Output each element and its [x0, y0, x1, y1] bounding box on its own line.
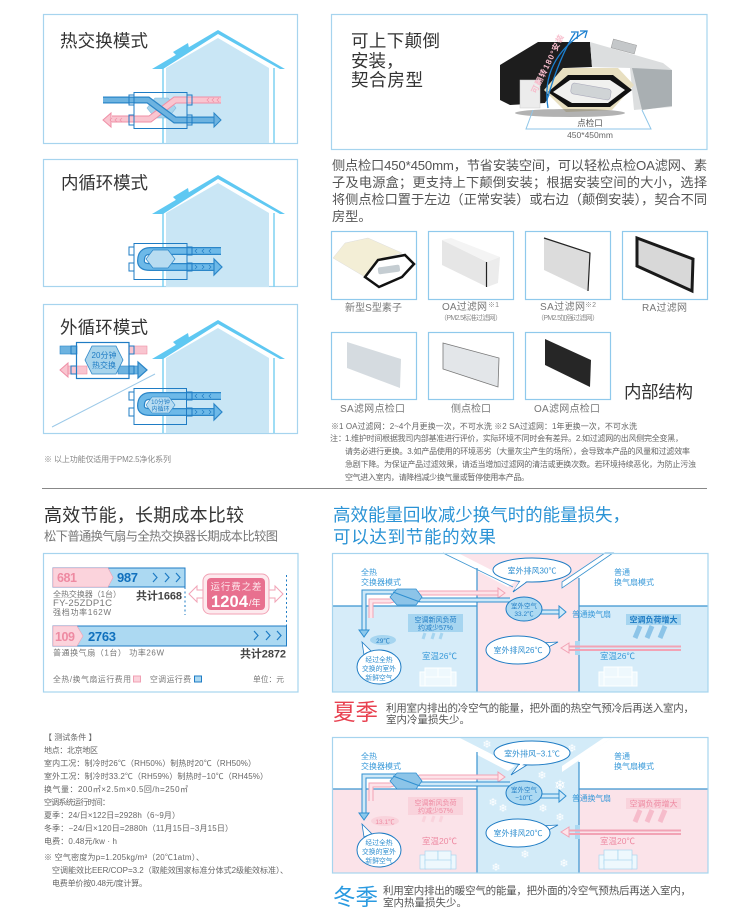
notes: filter replacement: 空气进入室内，请降档减少换气量或暂停使用本产品。 [345, 472, 529, 482]
bubble: outdoor air 33.2: 33.2℃ [514, 610, 534, 618]
airflow: winter pipes [359, 772, 681, 839]
text block: test conditions: 空调系统运行时间： [44, 797, 110, 807]
caption: SA filter: ※2 [585, 301, 596, 309]
labels: summer room temperature [422, 651, 635, 661]
diagram: heat exchanger airflow [103, 92, 221, 128]
filter card: OA filter [428, 232, 514, 300]
arrows: flip direction [547, 31, 587, 108]
bubble: outdoor exhaust 20: 室外排风20℃ [494, 828, 542, 838]
bar: ordinary ventilation fan [53, 626, 286, 646]
total: 1668: 共计1668 [136, 588, 182, 602]
legend: 单位：元 [253, 674, 284, 684]
text block: winter description [383, 884, 691, 909]
notes: filter replacement [330, 421, 696, 482]
caption: RA filter: RA过滤网 [642, 301, 687, 314]
badge: running cost difference: /年 [249, 597, 261, 608]
box: winter fresh air load reduced: 空调新风负荷 [414, 798, 456, 807]
total: 2872: 共计2872 [240, 646, 286, 660]
bubble: outdoor exhaust 26: 室外排风26℃ [494, 645, 542, 655]
icon: house [152, 175, 285, 287]
notes: filter replacement: 请务必进行更换。3.如产品使用的环境恶劣（大量灰尘产生的场所），会导致本产品的风量和过滤效率 [345, 446, 690, 456]
labels: winter modes [361, 751, 654, 771]
text block: test conditions: 空调能效比EER/COP=3.2（取能效国家标准分体式2级能效标准）、 [52, 865, 288, 875]
filter card: OA inspection port [526, 332, 610, 400]
heading: reversible installation: 可上下颠倒 [351, 31, 440, 51]
label: supply air 13.1 [371, 816, 399, 826]
snowflakes: ❄ [520, 849, 530, 861]
caption: S-type element: 新型S型素子 [345, 301, 402, 314]
bubble: winter fresh air after exchange: 交换的室外 [362, 847, 396, 856]
airflow: summer pipes [359, 588, 681, 655]
labels: summer modes [361, 567, 654, 587]
text block: test conditions: 地点：北京地区 [44, 745, 98, 755]
caption: OA filter: ※1 [488, 301, 499, 309]
callout: inspection port size: 450*450mm [567, 130, 613, 140]
diagram: 10 minute internal circulation [129, 388, 222, 424]
heading: reversible installation: 安装， [351, 51, 404, 71]
panel: reversible installation [332, 14, 707, 150]
labels: winter modes: 全热 [361, 751, 377, 761]
bar: ordinary ventilation fan: 109 [55, 630, 75, 644]
bar: ordinary ventilation fan: 2763 [88, 629, 116, 644]
text block: test conditions: 夏季：24/日×122日=2928h（6~9月） [44, 810, 180, 820]
captions: inspection ports: SA滤网点检口 [340, 402, 405, 415]
filter card: SA inspection port [332, 332, 416, 400]
text block: installation description: 侧点检口450*450mm，节省安装空间，可以轻松点检OA滤网、素 [332, 158, 707, 173]
diagram: summer energy recovery [332, 553, 708, 692]
text block: test conditions: 冬季：−24/日×120日=2880h（11月15日−3月15日） [44, 823, 233, 833]
text block: test conditions: 换气量：200㎡×2.5m×0.5回/h=250㎥ [44, 784, 188, 794]
snowflakes: ❄ [559, 858, 569, 870]
heading: energy recovery [333, 505, 630, 547]
bubble: outdoor air -10: −10℃ [515, 794, 533, 802]
diagram: winter energy recovery [332, 737, 708, 874]
text block: test conditions [44, 732, 288, 888]
panel: heat exchange mode [44, 14, 298, 144]
notes: filter replacement: ※1 OA过滤网：2~4个月更换一次，不可水洗 ※2 SA过滤网：1年更换一次，不可水洗 [331, 421, 637, 431]
snowflakes: ❄ [538, 803, 548, 815]
filter card: side inspection port [428, 332, 514, 400]
heading: long-term cost comparison: 高效节能，长期成本比较 [44, 506, 244, 526]
text block: summer description: 室内冷量损失少。 [386, 713, 470, 726]
snowflakes [482, 739, 577, 874]
snowflakes: ❄ [491, 862, 501, 874]
diagonal separator [52, 374, 155, 427]
heading: heat exchange mode: 热交换模式 [60, 31, 148, 51]
icon: winter sofa right [599, 850, 637, 869]
label: supply air 29: 29℃ [376, 637, 390, 645]
box: winter fresh air load reduced [408, 797, 463, 822]
labels: summer modes: 换气扇模式 [614, 577, 654, 587]
box: winter AC load increase [626, 798, 681, 822]
label: supply air 13.1: 13.1℃ [375, 818, 395, 826]
snowflakes: ❄ [567, 743, 577, 755]
text block: test conditions: ※ 空气密度为p=1.205kg/m³（20℃1atm）、 [44, 852, 204, 862]
labels: winter modes: 换气扇模式 [614, 761, 654, 771]
snowflakes: ❄ [488, 797, 498, 809]
snowflakes: ❄ [555, 812, 565, 824]
bubble: winter fresh air after exchange: 新鲜空气 [365, 856, 393, 865]
label: ordinary fan: 普通换气扇 [572, 609, 611, 619]
labels: summer modes: 普通 [614, 567, 630, 577]
text block: winter description: 利用室内排出的暖空气的能量，把外面的冷空气预热后再送入室内， [383, 884, 691, 897]
panel: external circulation mode [44, 304, 298, 434]
text block: test conditions: 电费单价按0.48元/度计算。 [52, 878, 147, 888]
heading: energy recovery: 可以达到节能的效果 [333, 527, 496, 547]
footnote: PM2.5 series: ※ 以上功能仅适用于PM2.5净化系列 [44, 454, 171, 464]
caption: SA filter [537, 300, 599, 322]
badge: running cost difference [189, 574, 283, 614]
label: ordinary ventilation fan: 普通换气扇（1台） 功率26W [53, 648, 164, 658]
notes: filter replacement: 1.维护时间根据我司内部基准进行评价，实际环境不同时会有差异。2.如过滤网的出风侧完全变黑， [345, 433, 683, 443]
heading: winter: 冬季 [333, 885, 378, 910]
panel: internal circulation mode [44, 160, 298, 287]
bubble: fresh air after exchange: 经过全热 [365, 655, 393, 664]
icon: house [152, 30, 285, 143]
labels: summer modes: 交换器模式 [361, 577, 401, 587]
bar: total heat exchanger [53, 568, 185, 587]
box: AC load increase: 空调负荷增大 [630, 614, 678, 624]
diagram: 10 minute internal circulation: 10分钟 [151, 398, 170, 406]
badge: running cost difference: 运行费之差 [210, 581, 262, 593]
heading: internal circulation mode: 内循环模式 [61, 173, 148, 193]
text block: test conditions: 室外工况：制冷时33.2℃（RH59%）制热时−10℃（RH45%） [44, 771, 268, 781]
legend: 空调运行费 [150, 674, 191, 684]
diagram: 10 minute internal circulation: 内循环 [151, 405, 170, 413]
icon: sofa left [420, 668, 456, 686]
labels: winter modes: 普通 [614, 751, 630, 761]
box: AC load increase [626, 614, 681, 638]
icon: winter sofa left [420, 851, 456, 869]
heading: external circulation mode: 外循环模式 [60, 318, 148, 338]
captions: inspection ports: 侧点检口 [451, 402, 491, 415]
heading: internal structure: 内部结构 [624, 382, 693, 402]
diagram: 20 minute heat exchange: 热交换 [92, 360, 116, 370]
legend: 全热/换气扇运行费用 [53, 674, 131, 684]
labels: winter modes: 交换器模式 [361, 761, 401, 771]
badge: running cost difference: 1204 [211, 593, 249, 611]
bubble: outdoor exhaust -3.1: 室外排风−3.1℃ [504, 748, 560, 758]
labels: winter room temperature [422, 836, 635, 846]
box: winter fresh air load reduced: 约减少57% [418, 806, 453, 815]
illustration: ventilation unit [500, 39, 672, 117]
bubble: winter fresh air after exchange: 经过全热 [365, 838, 393, 847]
diagram: 20 minute heat exchange [60, 342, 147, 378]
bubble: fresh air after exchange: 交换的室外 [362, 664, 396, 673]
labels: summer room temperature: 室温26℃ [600, 651, 635, 661]
snowflakes: ❄ [482, 739, 492, 751]
text block: test conditions: 电费：0.48元/kw · h [44, 836, 117, 846]
snowflakes: ❄ [554, 777, 566, 793]
text block: installation description [332, 158, 707, 224]
bubble: outdoor exhaust 20 [486, 819, 558, 847]
diagram: 20 minute heat exchange: 20分钟 [92, 350, 116, 360]
caption: OA filter: （PM2.5标准过滤网） [440, 313, 502, 322]
notes: filter replacement: 注： [330, 433, 346, 443]
text block: winter description: 室内热量损失少。 [383, 896, 467, 909]
heading: reversible installation [351, 31, 440, 90]
box: fresh air load reduced [408, 614, 463, 639]
label: supply air 29 [370, 635, 396, 645]
bubble: outdoor exhaust 26 [486, 636, 558, 664]
label: ordinary fan winter: 普通换气扇 [572, 793, 611, 803]
bubble: outdoor exhaust 30: 室外排风30℃ [508, 566, 556, 576]
filter card: RA filter [622, 232, 708, 300]
heading: energy recovery: 高效能量回收减少换气时的能量损失， [333, 505, 630, 525]
bubble: winter fresh air after exchange [357, 824, 401, 867]
text block: summer description [386, 702, 694, 726]
bubble: outdoor air 33.2 [506, 597, 542, 621]
callout: inspection port size: 点检口 [577, 118, 603, 128]
text block: test conditions: 室内工况：制冷时26℃（RH50%）制热时20℃（RH50%） [44, 758, 256, 768]
caption: OA filter [440, 300, 502, 322]
bubble: outdoor exhaust 30 [493, 558, 571, 592]
legend [53, 674, 284, 684]
bubble: outdoor air -10: 室外空气 [511, 785, 538, 794]
label: total heat exchanger: FY-25ZDP1C [53, 598, 112, 609]
text block: test conditions: 【 测试条件 】 [44, 732, 96, 742]
bubble: outdoor exhaust -3.1 [494, 741, 570, 775]
caption: OA filter: OA过滤网 [442, 300, 487, 313]
text block: installation description: 子及电源盒；更支持上下颠倒安装；根据安装空间的大小，选择 [332, 174, 707, 191]
icon: sofa right [599, 667, 637, 686]
filter card: SA filter [526, 232, 610, 300]
text block: summer description: 利用室内排出的冷空气的能量，把外面的热空气预冷后再送入室内， [386, 702, 694, 714]
text block: installation description: 将侧点检口置于左边（正常安装）或右边（颠倒安装），契合不同 [332, 192, 707, 207]
bubble: outdoor air 33.2: 室外空气 [511, 601, 538, 610]
callout: inspection port size [526, 110, 651, 140]
heading: summer: 夏季 [333, 700, 378, 725]
filter card: S-type element [332, 232, 416, 300]
bubble: fresh air after exchange [357, 642, 401, 684]
box: winter AC load increase: 空调负荷增大 [630, 798, 678, 808]
label: reversible 180 degrees: 可翻转180°安装 [529, 33, 566, 95]
caption: SA filter: SA过滤网 [540, 300, 585, 313]
bubble: outdoor air -10 [506, 781, 542, 805]
label: total heat exchanger [53, 589, 121, 617]
captions: inspection ports: OA滤网点检口 [534, 402, 600, 415]
bar: total heat exchanger: 681 [57, 571, 77, 585]
bar: total heat exchanger: 987 [117, 570, 138, 585]
captions: inspection ports [340, 402, 600, 415]
labels: winter room temperature: 室温20℃ [422, 836, 457, 846]
diagram: internal circulation airflow [129, 244, 222, 280]
snowflakes: ❄ [537, 770, 547, 782]
box: fresh air load reduced: 约减少57% [418, 623, 453, 632]
panel: cost comparison chart [44, 554, 298, 692]
labels: winter room temperature: 室温20℃ [600, 836, 635, 846]
heading: reversible installation: 契合房型 [351, 70, 423, 90]
snowflakes: ❄ [498, 803, 508, 815]
labels: summer room temperature: 室温26℃ [422, 651, 457, 661]
notes: filter replacement: 急剧下降。为保证产品过滤效果，请适当增加过滤网的清洁或更换次数。若环境持续恶化，为防止污浊 [345, 459, 696, 469]
icon: house [152, 320, 285, 433]
label: total heat exchanger: 强档功率162W [53, 607, 111, 617]
label: total heat exchanger: 全热交换器（1台） [53, 589, 121, 599]
subheading: cost comparison chart: 松下普通换气扇与全热交换器长期成本比较图 [44, 528, 278, 544]
caption: SA filter: （PM2.5加强过滤网） [537, 313, 599, 322]
text block: installation description: 房型。 [332, 209, 372, 224]
box: fresh air load reduced: 空调新风负荷 [414, 615, 456, 624]
bubble: fresh air after exchange: 新鲜空气 [365, 673, 393, 682]
labels: summer modes: 全热 [361, 567, 377, 577]
